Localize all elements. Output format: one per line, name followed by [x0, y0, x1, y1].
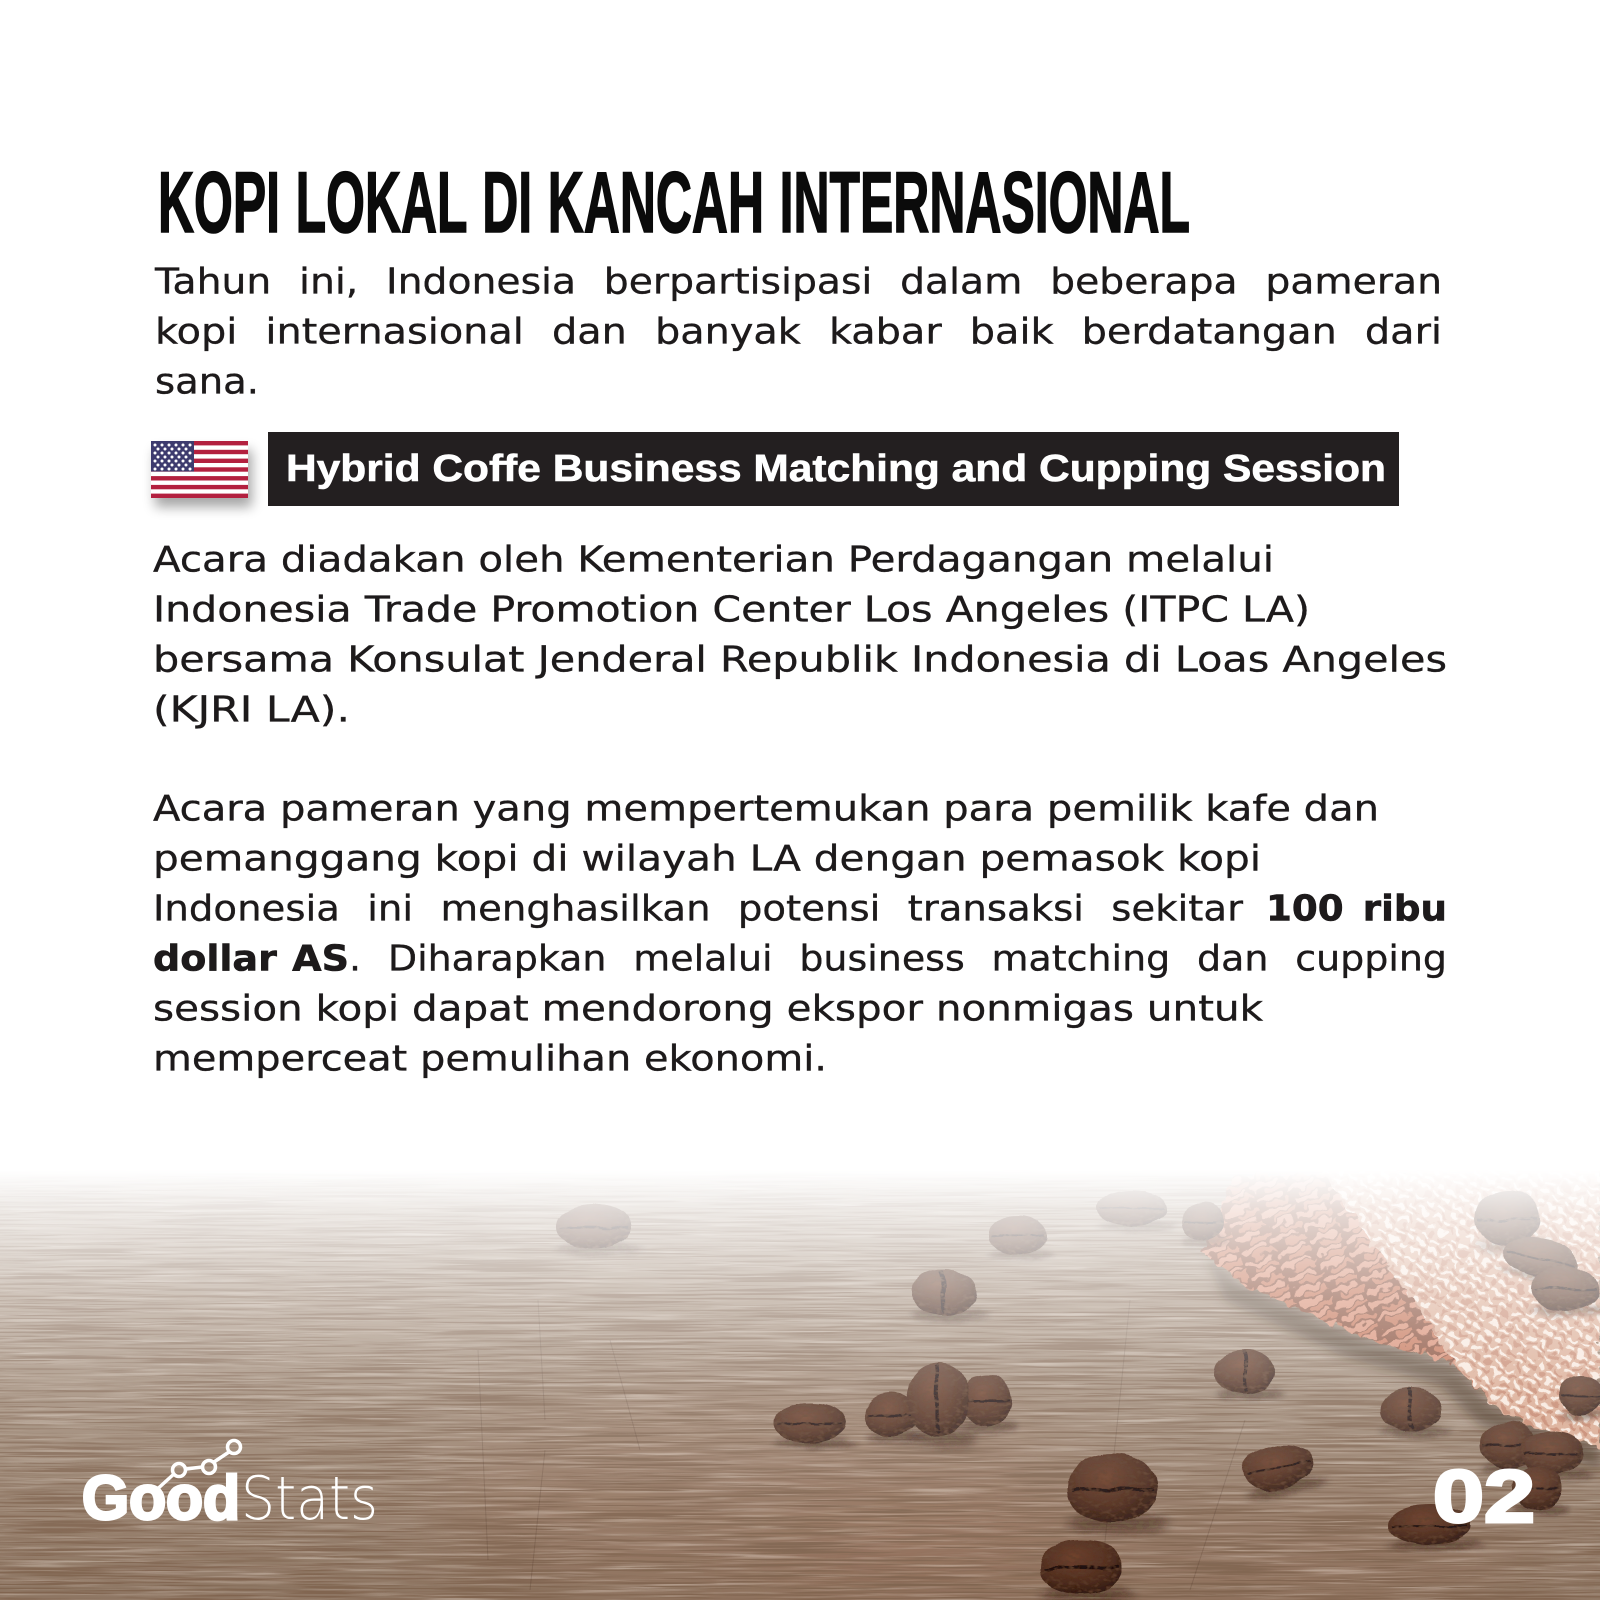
page number: 02 [1433, 1455, 1535, 1538]
photo: coffee beans on wooden table [0, 1170, 1600, 1600]
event heading banner [268, 432, 1399, 506]
burlap sack [1203, 1170, 1600, 1470]
logo wordmark: Good [82, 1464, 240, 1533]
intro paragraph: kopi internasional dan banyak kabar baik berdatangan dari [155, 312, 1442, 352]
icon: USA flag [151, 441, 252, 507]
body paragraph: transaction potential: Indonesia ini menghasilkan potensi transaksi sekitar [153, 888, 1243, 930]
white fade over the photo [0, 1170, 1600, 1542]
event heading banner: Hybrid Coffe Business Matching and Cupping Session [286, 448, 1386, 490]
body paragraph: transaction potential: 100 ribu [1266, 888, 1447, 930]
body paragraph: transaction potential: . Diharapkan melalui business matching dan cupping [349, 938, 1447, 980]
logo: GoodStats [82, 1440, 240, 1533]
body paragraph: transaction potential: pemanggang kopi di wilayah LA dengan pemasok kopi [153, 838, 1261, 880]
body paragraph: transaction potential: memperceat pemulihan ekonomi. [153, 1038, 827, 1080]
logo chart line icon [153, 1440, 240, 1493]
body paragraph: organizers: (KJRI LA). [153, 690, 350, 730]
intro paragraph [154, 262, 1442, 402]
body paragraph: transaction potential [153, 788, 1447, 1080]
intro paragraph: sana. [155, 362, 259, 402]
body paragraph: organizers: Acara diadakan oleh Kementerian Perdagangan melalui [153, 540, 1274, 580]
body paragraph: organizers: Indonesia Trade Promotion Center Los Angeles (ITPC LA) [153, 590, 1310, 630]
wooden table surface [0, 1170, 1600, 1600]
coffee beans [557, 1190, 1600, 1600]
body paragraph: transaction potential: Acara pameran yang mempertemukan para pemilik kafe dan [153, 788, 1379, 830]
body paragraph: transaction potential: dollar AS [153, 938, 349, 980]
body paragraph: transaction potential: session kopi dapat mendorong ekspor nonmigas untuk [153, 988, 1263, 1030]
logo wordmark: Stats: Stats [241, 1464, 378, 1534]
intro paragraph: Tahun ini, Indonesia berpartisipasi dalam beberapa pameran [154, 262, 1442, 302]
body paragraph: organizers [153, 540, 1447, 730]
body paragraph: organizers: bersama Konsulat Jenderal Republik Indonesia di Loas Angeles [153, 640, 1447, 680]
